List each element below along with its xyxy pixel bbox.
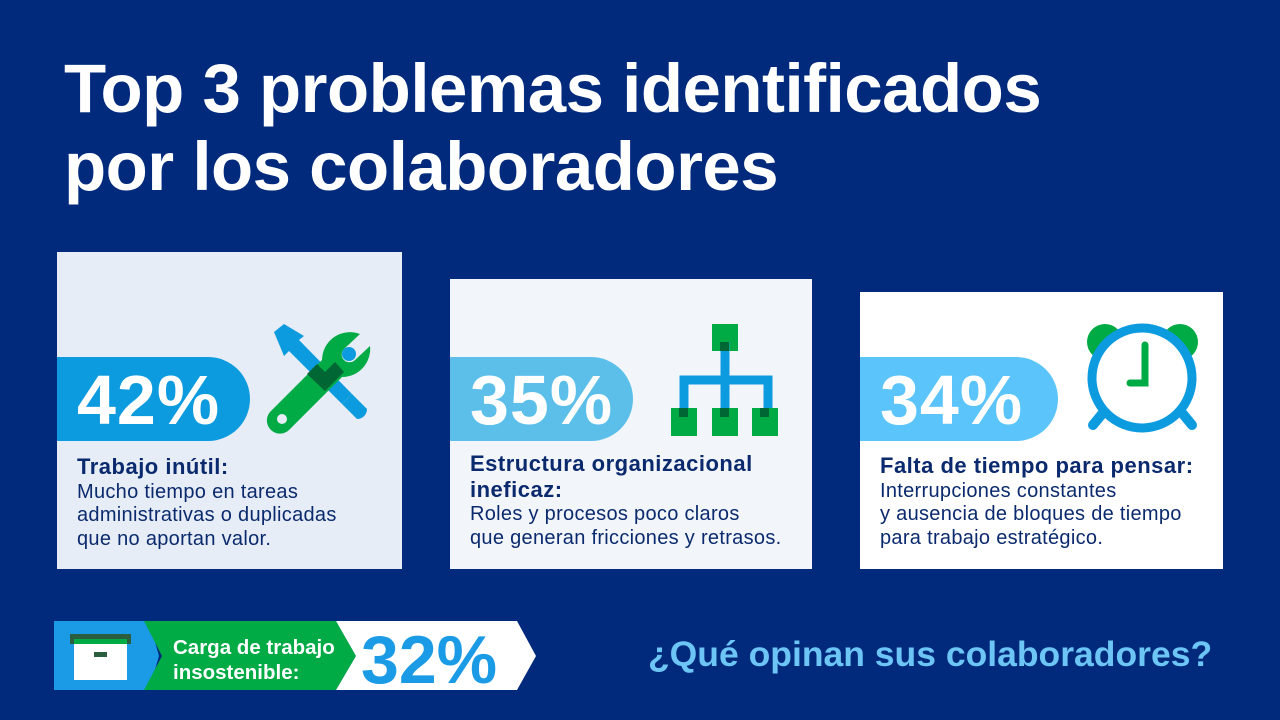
percent pill 42% bbox=[57, 357, 250, 441]
icon: box bbox=[70, 634, 131, 680]
title bbox=[64, 50, 1041, 205]
panel: trabajo inútil bbox=[57, 252, 402, 569]
percent pill 35%: 35% bbox=[470, 361, 613, 439]
text: trabajo inútil bbox=[77, 454, 337, 550]
icon: tools bbox=[266, 324, 370, 434]
text: falta de tiempo: Interrupciones constantes bbox=[880, 480, 1117, 502]
percent pill 34% bbox=[860, 357, 1058, 441]
text: estructura: que generan fricciones y retrasos. bbox=[470, 526, 781, 548]
bottom banner: carga de trabajo 32% bbox=[54, 621, 536, 691]
text: falta de tiempo: Falta de tiempo para pensar: bbox=[880, 453, 1194, 478]
panel: falta de tiempo bbox=[860, 292, 1223, 569]
text: trabajo inútil: Trabajo inútil: bbox=[77, 454, 229, 479]
icon: org chart bbox=[671, 324, 778, 436]
question text: ¿Qué opinan sus colaboradores? bbox=[648, 634, 1212, 674]
text: falta de tiempo bbox=[880, 453, 1194, 548]
percent pill 34%: 34% bbox=[880, 361, 1023, 439]
text: trabajo inútil: que no aportan valor. bbox=[77, 528, 271, 550]
text: estructura: Estructura organizacional bbox=[470, 451, 753, 476]
text: trabajo inútil: administrativas o duplicadas bbox=[77, 504, 337, 526]
title: Top 3 problemas identificados bbox=[64, 50, 1041, 127]
text: falta de tiempo: para trabajo estratégico. bbox=[880, 526, 1103, 548]
text: estructura: ineficaz: bbox=[470, 476, 563, 502]
percent pill 42%: 42% bbox=[77, 361, 220, 439]
text: falta de tiempo: y ausencia de bloques de tiempo bbox=[880, 503, 1182, 525]
panel: estructura organizacional bbox=[450, 279, 812, 569]
title: por los colaboradores bbox=[64, 128, 778, 205]
bottom banner: carga de trabajo 32%: insostenible: bbox=[173, 661, 299, 684]
text: estructura: Roles y procesos poco claros bbox=[470, 503, 740, 525]
bottom banner: carga de trabajo 32%: Carga de trabajo bbox=[173, 636, 335, 659]
icon: alarm clock bbox=[1087, 324, 1198, 432]
text: trabajo inútil: Mucho tiempo en tareas bbox=[77, 480, 298, 502]
text: estructura bbox=[470, 451, 781, 548]
